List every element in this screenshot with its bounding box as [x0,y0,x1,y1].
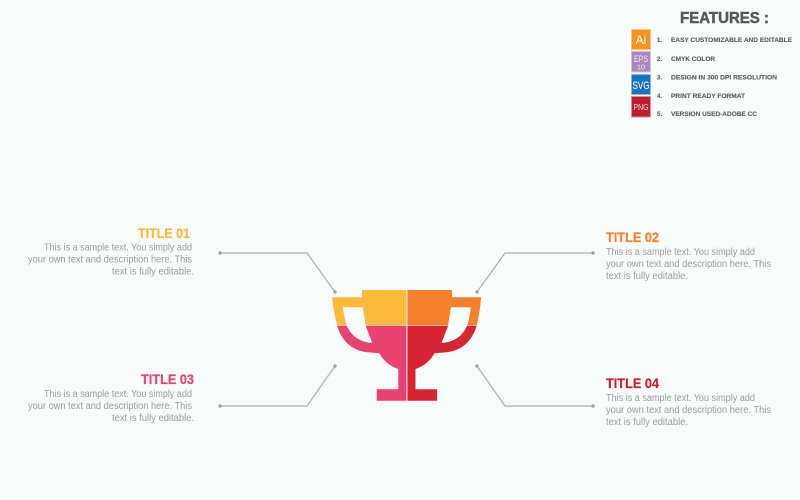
trophy: top right orange [407,290,481,325]
icon: EPS 10: 10 [637,62,645,72]
text block: title 01: This is a sample text. You simply add [44,242,192,254]
features list: 5. [657,111,662,118]
connector: bottom left [218,364,337,408]
features list: 3. [657,74,662,82]
text block: title 04: text is fully editable. [606,417,688,428]
text block: title 02: your own text and description here. This [606,259,771,270]
text block: title 03 [28,371,194,424]
trophy [332,290,481,401]
icon: SVG [632,74,650,94]
trophy: bottom left pink [337,326,406,401]
icon: SVG: SVG [632,80,650,92]
trophy: top left amber [332,290,406,325]
icon: EPS 10: EPS [634,54,648,64]
icon: PNG [632,96,650,117]
features list: 4. [657,93,662,100]
features list: CMYK COLOR [671,56,716,63]
text block: title 01: TITLE 01 [138,225,190,241]
features list: PRINT READY FORMAT [671,93,745,100]
features list: VERSION USED-ADOBE CC [671,111,758,118]
text block: title 04: your own text and description here. This [606,405,771,416]
text block: title 04: This is a sample text. You simply add [606,393,755,404]
connector: top left [218,251,337,294]
icon: EPS 10 [632,52,650,72]
trophy: bottom right red [407,326,477,401]
icon: Ai: Ai [636,33,646,47]
text block: title 02: TITLE 02 [606,229,659,245]
features heading: FEATURES : [680,10,769,27]
connector: top right [475,251,595,294]
features list: 1. [657,37,662,44]
text block: title 03: This is a sample text. You simply add [44,389,192,400]
features list: DESIGN IN 300 DPI RESOLUTION [671,74,778,82]
connector: bottom right [475,364,595,408]
text block: title 03: text is fully editable. [112,413,194,424]
text block: title 03: TITLE 03 [141,371,194,387]
icon: Ai [632,30,650,50]
text block: title 02 [606,229,771,282]
text block: title 01 [28,225,194,278]
text block: title 02: This is a sample text. You simply add [606,247,755,258]
features list: 2. [657,56,662,63]
features list: EASY CUSTOMIZABLE AND EDITABLE [671,37,792,44]
icon: PNG: PNG [634,102,648,112]
text block: title 01: your own text and description here. This [28,254,192,266]
text block: title 04 [606,375,771,428]
text block: title 02: text is fully editable. [606,271,688,282]
features list [657,37,792,118]
text block: title 04: TITLE 04 [606,375,659,391]
text block: title 01: text is fully editable. [112,266,194,278]
text block: title 03: your own text and description here. This [28,401,192,412]
